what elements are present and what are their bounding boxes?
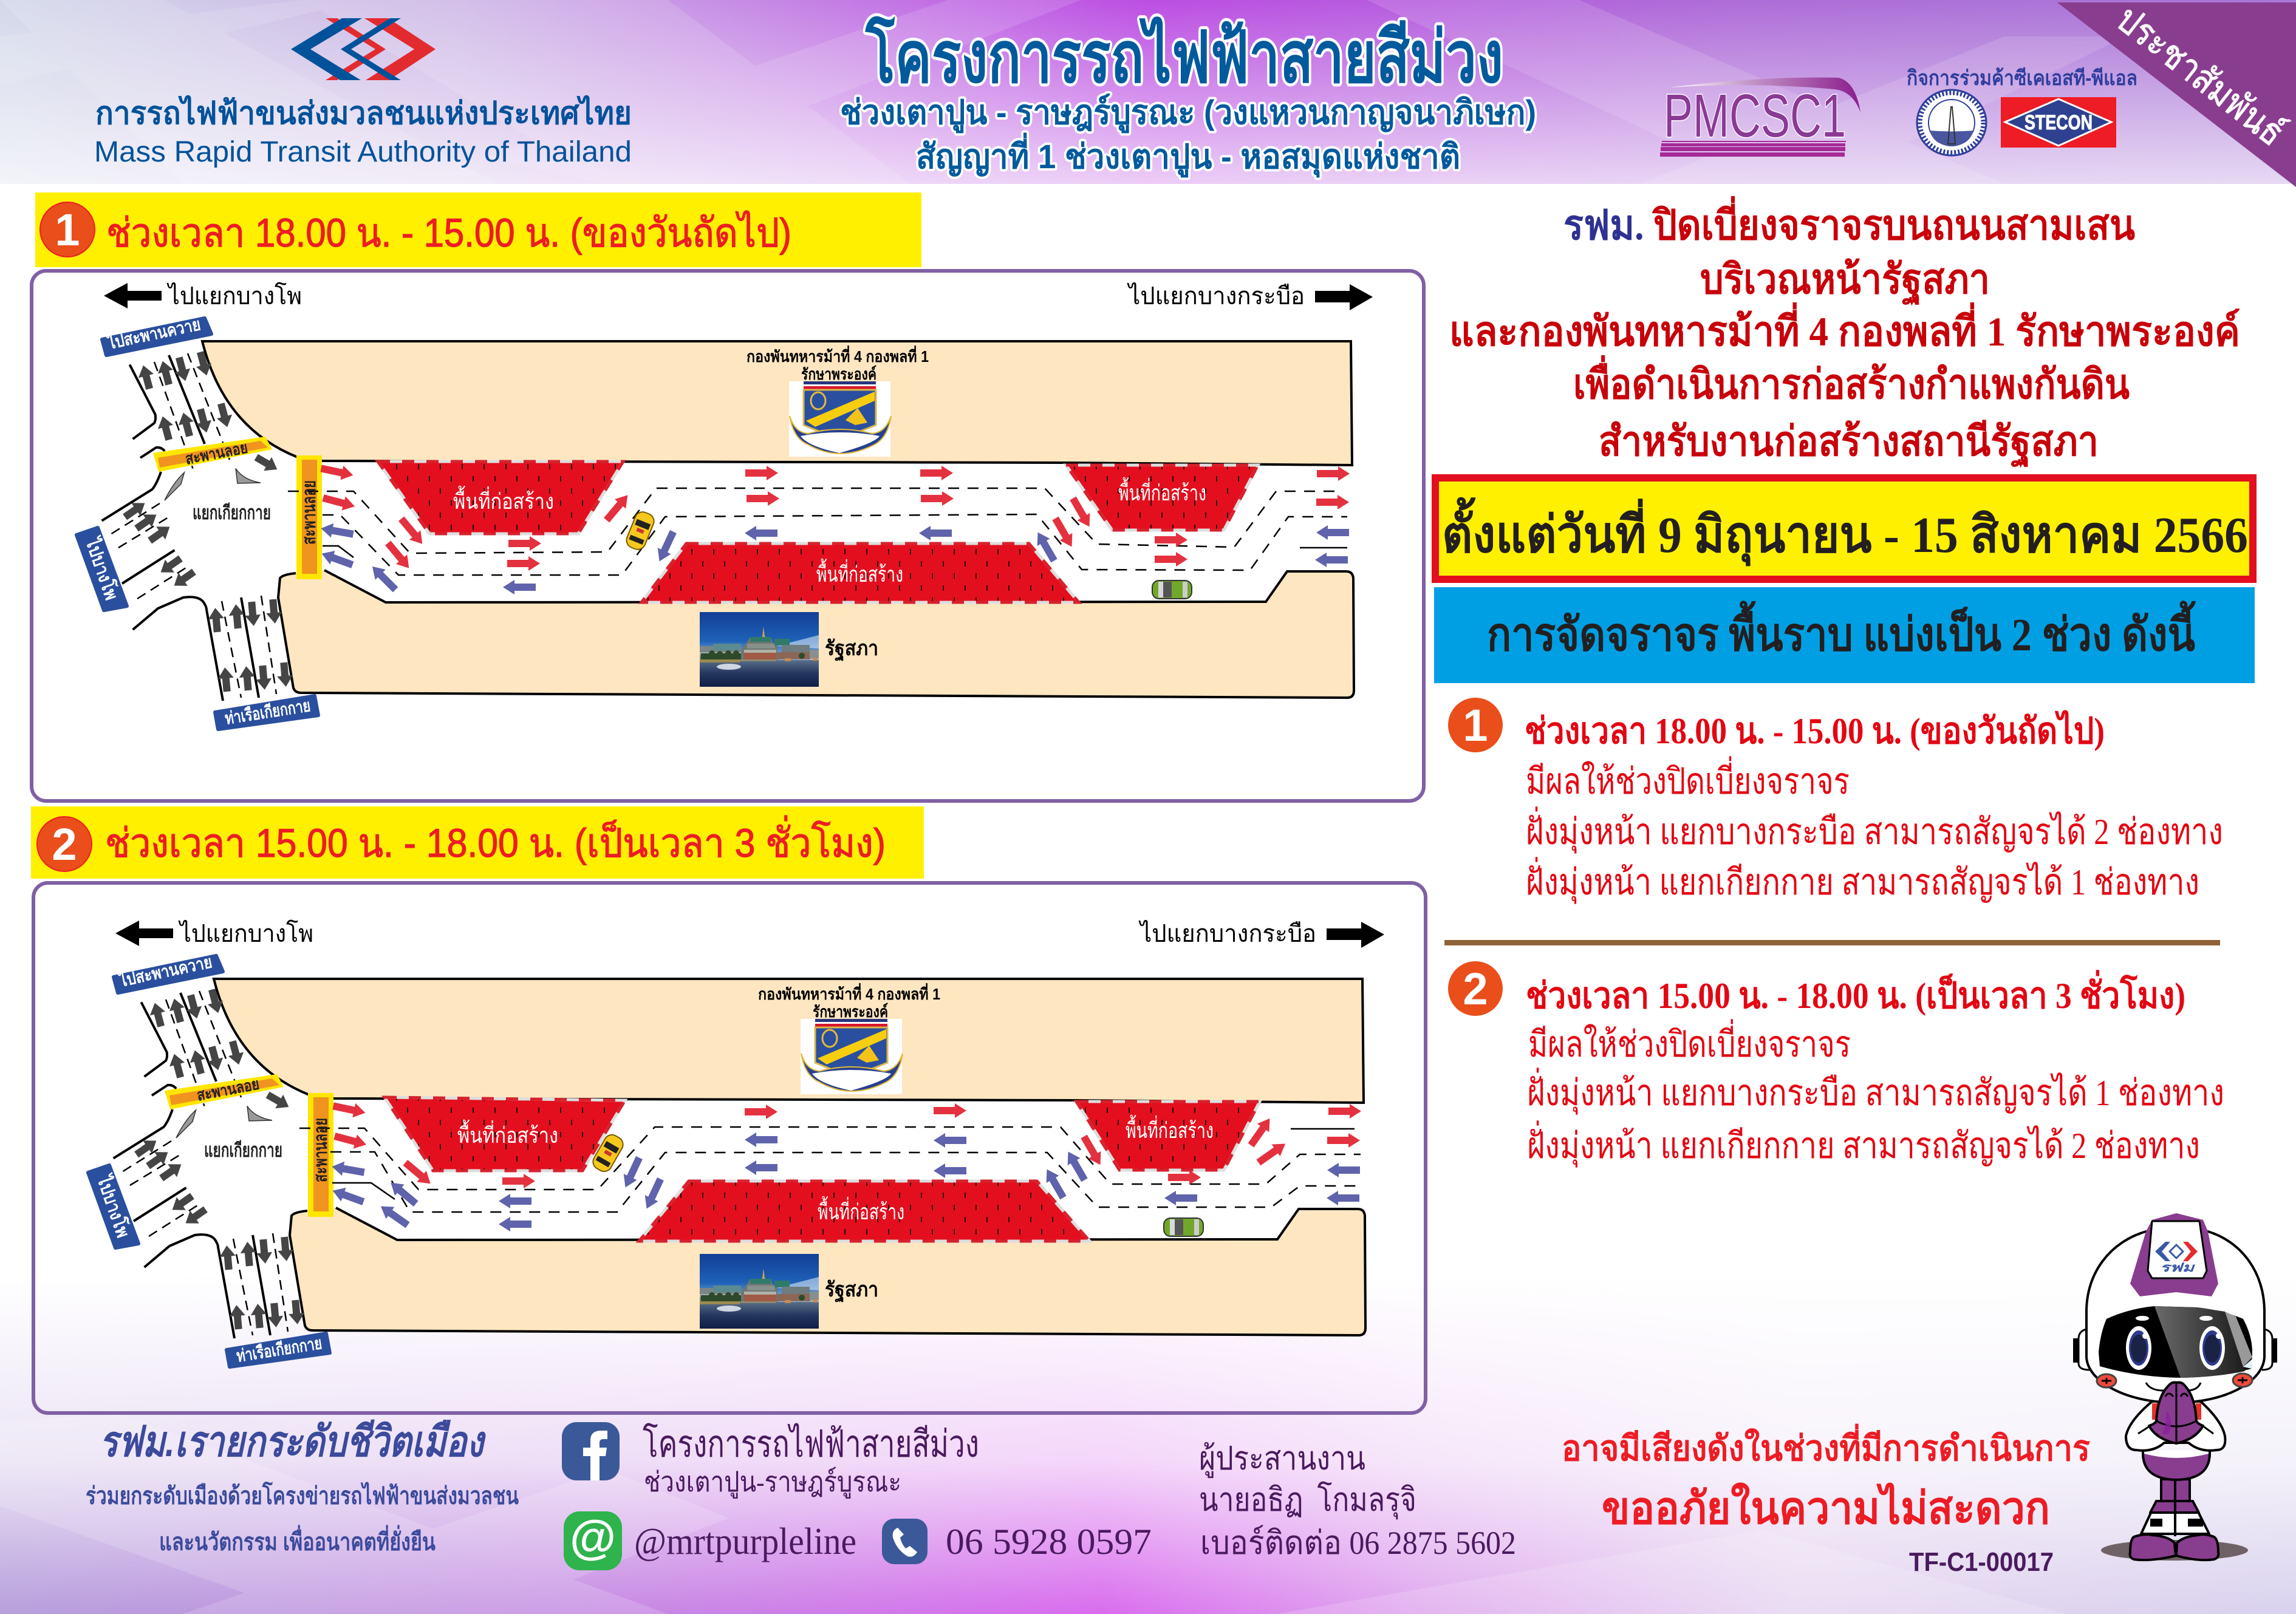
labels xyxy=(93,920,1316,1366)
labels: ไปแยกบางกระบือ xyxy=(1138,920,1316,947)
facebook page text xyxy=(643,1423,979,1499)
icon: facebook xyxy=(562,1422,620,1480)
panel 2: traffic diagram 15.00-18.00 xyxy=(33,883,1426,1413)
line handle: @mrtpurpleline xyxy=(634,1521,856,1562)
period 1 details: ช่วงเวลา 18.00 น. - 15.00 น. (ของวันถัดไป) xyxy=(1525,709,2105,751)
header background xyxy=(0,0,2296,184)
apology notice xyxy=(1562,1423,2090,1533)
lane dashes xyxy=(299,1127,1361,1212)
section 1 heading bar: ช่วงเวลา 18.00 น. - 15.00 น. (ของวันถัดไป) xyxy=(106,210,791,255)
notice heading: บริเวณหน้ารัฐสภา xyxy=(1700,256,1990,306)
MRTA logo xyxy=(291,18,436,80)
labels: ท่าเรือเกียกกาย xyxy=(224,696,312,728)
STECON logo xyxy=(2001,97,2116,148)
helmet xyxy=(2073,1338,2079,1363)
lane dashes xyxy=(288,488,1347,575)
MRTA Thai name: การรถไฟฟ้าขนส่งมวลชนแห่งประเทศไทย xyxy=(95,95,632,131)
panel 1: traffic diagram 18.00-15.00 xyxy=(32,271,1424,801)
crest xyxy=(801,1019,903,1094)
coordinator block xyxy=(1199,1440,1516,1561)
parliament photo xyxy=(700,1254,819,1329)
zone C xyxy=(1066,465,1258,530)
section 2 heading bar xyxy=(31,806,924,879)
facebook page text: ช่วงเตาปูน-ราษฎร์บูรณะ xyxy=(644,1466,901,1499)
subtitle line 2: สัญญาที่ 1 ช่วงเตาปูน - หอสมุดแห่งชาติ xyxy=(916,132,1460,178)
zone A xyxy=(384,1097,625,1171)
slogan block: รฟม.เรายกระดับชีวิตเมือง xyxy=(100,1418,486,1465)
traffic arrows xyxy=(330,1099,1361,1231)
labels: รักษาพระองค์ xyxy=(813,1003,888,1021)
facebook page text: โครงการรถไฟฟ้าสายสีม่วง xyxy=(643,1423,979,1465)
green car xyxy=(1152,581,1192,599)
labels: ไปแยกบางโพ xyxy=(178,920,313,947)
slogan block xyxy=(86,1418,519,1556)
PMCSC1 logo xyxy=(1660,78,1860,157)
slogan block: ร่วมยกระดับเมืองด้วยโครงข่ายรถไฟฟ้าขนส่งมวลชน xyxy=(86,1482,519,1510)
period 2 details: ช่วงเวลา 15.00 น. - 18.00 น. (เป็นเวลา 3 ชั่วโมง) xyxy=(1526,970,2185,1016)
road base 1 xyxy=(77,283,1373,729)
labels: แยกเกียกกาย xyxy=(204,1139,282,1161)
icon: at sign: @ xyxy=(570,1510,616,1564)
coordinator block: นายอธิฏ โกมลรุจิ xyxy=(1199,1481,1416,1520)
labels: สะพานลอย xyxy=(299,480,319,545)
road base 2 xyxy=(88,921,1384,1367)
labels: ไปสะพานควาย xyxy=(104,314,202,353)
labels: ท่าเรือเกียกกาย xyxy=(235,1333,323,1366)
traffic arrows xyxy=(319,461,1350,595)
mascot xyxy=(2073,1213,2277,1561)
green car xyxy=(1164,1218,1203,1236)
coordinator block: เบอร์ติดต่อ 06 2875 5602 xyxy=(1200,1525,1516,1561)
notice heading: สำหรับงานก่อสร้างสถานีรัฐสภา xyxy=(1599,418,2099,468)
mascot: รฟม xyxy=(2160,1261,2196,1275)
labels: รัฐสภา xyxy=(825,1278,878,1303)
period 2 details xyxy=(1448,961,2224,1168)
document code: TF-C1-00017 xyxy=(1909,1547,2054,1577)
section 1 heading bar: 1 xyxy=(55,205,80,255)
joint venture label: กิจการร่วมค้าซีเคเอสที-พีแอล xyxy=(1907,67,2137,90)
parliament photo xyxy=(700,612,819,687)
labels xyxy=(81,282,1305,728)
date box xyxy=(1435,478,2253,579)
torso xyxy=(2143,1451,2210,1480)
labels: ไปสะพานควาย xyxy=(116,952,214,990)
apology notice: ขออภัยในความไม่สะดวก xyxy=(1602,1482,2050,1533)
MRTA English name: Mass Rapid Transit Authority of Thailand xyxy=(94,136,632,168)
section 2 heading bar: ช่วงเวลา 15.00 น. - 18.00 น. (เป็นเวลา 3 ชั่วโมง) xyxy=(105,816,886,865)
blue traffic banner xyxy=(1434,587,2255,683)
arms xyxy=(2126,1401,2225,1451)
labels: พื้นที่ก่อสร้าง xyxy=(1126,1114,1214,1143)
labels: พื้นที่ก่อสร้าง xyxy=(1118,477,1206,505)
labels: สะพานลอย xyxy=(311,1118,331,1182)
date box: ตั้งแต่วันที่ 9 มิถุนายน - 15 สิงหาคม 2566 xyxy=(1442,497,2248,567)
period 1 details xyxy=(1448,698,2223,904)
subtitle line 1: ช่วงเตาปูน - ราษฎร์บูรณะ (วงแหวนกาญจนาภิเษก) xyxy=(840,93,1536,134)
labels: ไปแยกบางกระบือ xyxy=(1127,282,1305,310)
visor xyxy=(2099,1306,2252,1378)
legs xyxy=(2130,1479,2218,1560)
notice heading xyxy=(1449,196,2240,468)
PMCSC1 logo: PMCSC1 xyxy=(1664,82,1846,150)
labels: ไปบางโพ xyxy=(81,534,123,603)
labels: พื้นที่ก่อสร้าง xyxy=(453,485,554,514)
labels: สะพานลอย xyxy=(183,438,249,468)
zone B xyxy=(641,543,1079,602)
STECON logo: STECON xyxy=(2024,111,2093,134)
section 1 heading bar xyxy=(35,192,921,267)
period 1 details: มีผลให้ช่วงปิดเบี่ยงจราจร xyxy=(1526,756,1850,802)
labels: สะพานลอย xyxy=(195,1075,261,1105)
icon: phone xyxy=(882,1519,928,1564)
blue traffic banner: การจัดจราจร พื้นราบ แบ่งเป็น 2 ช่วง ดังนี้ xyxy=(1487,601,2196,661)
notice heading: รฟม. ปิดเบี่ยงจราจรบนถนนสามเสน xyxy=(1563,196,2135,248)
labels: รัฐสภา xyxy=(825,637,878,662)
footer background xyxy=(0,1275,2296,1614)
zone C xyxy=(1076,1102,1260,1170)
labels: รักษาพระองค์ xyxy=(801,365,876,383)
labels: พื้นที่ก่อสร้าง xyxy=(816,558,903,587)
labels: แยกเกียกกาย xyxy=(193,502,271,523)
crest xyxy=(789,381,891,457)
labels: ไปบางโพ xyxy=(93,1171,135,1241)
notice heading: และกองพันทหารม้าที่ 4 กองพลที่ 1 รักษาพระองค์ xyxy=(1449,302,2240,355)
main title: โครงการรถไฟฟ้าสายสีม่วง xyxy=(865,16,1503,98)
hands xyxy=(2149,1383,2203,1443)
labels: พื้นที่ก่อสร้าง xyxy=(818,1196,904,1224)
coordinator block: ผู้ประสานงาน xyxy=(1199,1440,1365,1478)
CK seal logo xyxy=(1917,90,1986,155)
period 2 details: 2 xyxy=(1463,964,1488,1014)
phone number: 06 5928 0597 xyxy=(946,1522,1152,1562)
zone B xyxy=(639,1181,1090,1241)
labels: พื้นที่ก่อสร้าง xyxy=(457,1119,558,1148)
slogan block: และนวัตกรรม เพื่ออนาคตที่ยั่งยืน xyxy=(159,1525,436,1556)
labels: ไปแยกบางโพ xyxy=(166,282,302,310)
labels: กองพันทหารม้าที่ 4 กองพลที่ 1 xyxy=(747,345,929,366)
period 1 details: 1 xyxy=(1463,700,1488,751)
screws xyxy=(2097,1374,2252,1388)
period 2 details: มีผลให้ช่วงปิดเบี่ยงจราจร xyxy=(1528,1019,1851,1064)
yellow car xyxy=(624,509,656,552)
notice heading: เพื่อดำเนินการก่อสร้างกำแพงกันดิน xyxy=(1573,355,2130,407)
helmet logo xyxy=(2155,1242,2198,1261)
apology notice: อาจมีเสียงดังในช่วงที่มีการดำเนินการ xyxy=(1562,1423,2090,1468)
zone A xyxy=(378,461,623,534)
section 2 heading bar: 2 xyxy=(52,819,77,870)
labels: กองพันทหารม้าที่ 4 กองพลที่ 1 xyxy=(758,982,940,1003)
yellow car xyxy=(590,1132,626,1174)
